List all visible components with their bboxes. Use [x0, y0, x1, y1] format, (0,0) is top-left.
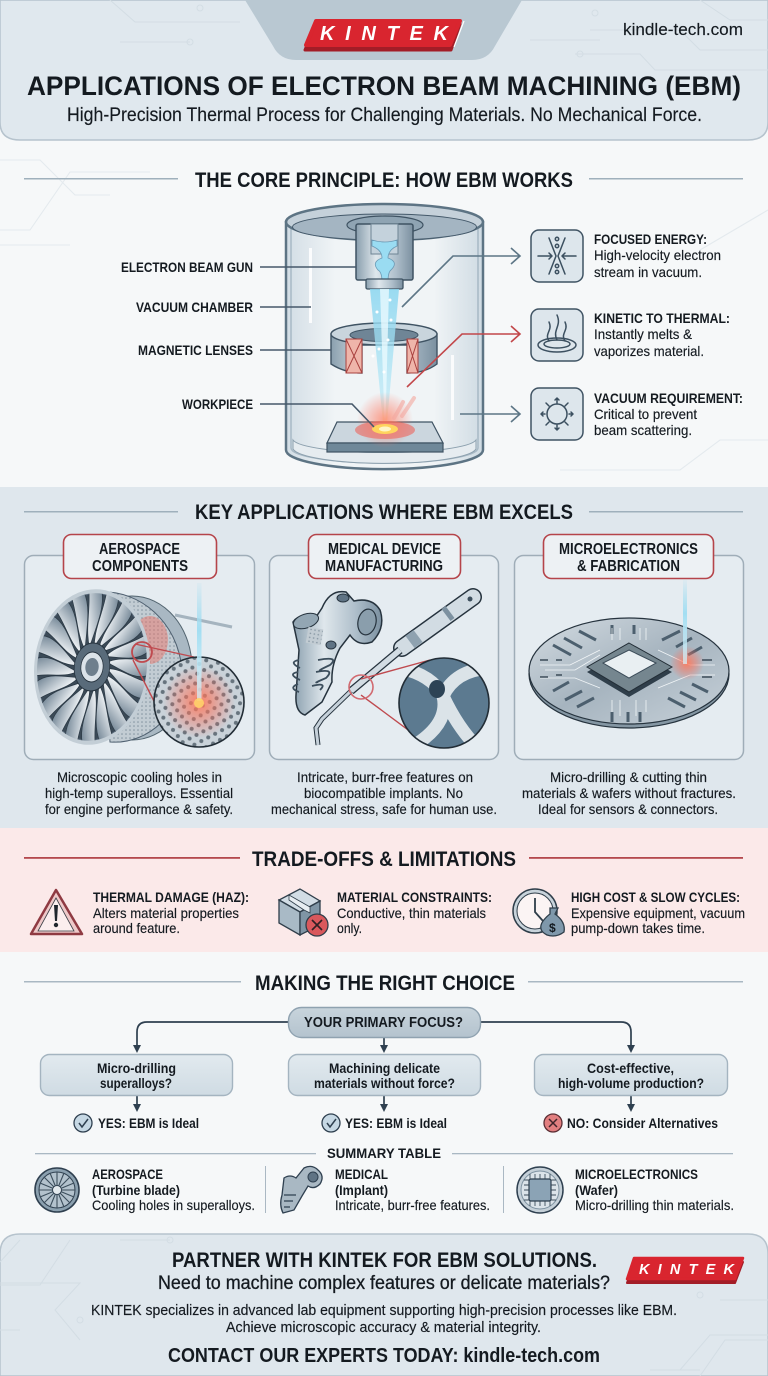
option: cost-effective: high-volume production? [558, 1075, 704, 1091]
description: aerospace: for engine performance & safety. [45, 801, 233, 817]
badge: medical device manufacturing: MEDICAL DEVICE [328, 541, 441, 558]
heading: trade-offs: TRADE-OFFS & LIMITATIONS [252, 848, 516, 871]
callout: focused energy: stream in vacuum. [594, 264, 702, 280]
result: no [544, 1114, 718, 1132]
arrow: vacuum requirement [460, 406, 520, 422]
arrow: kinetic to thermal [407, 326, 520, 387]
panel: medical [270, 534, 498, 760]
footer body text: Achieve microscopic accuracy & material integrity. [226, 1320, 541, 1336]
callout: kinetic to thermal: Instantly melts & [594, 326, 693, 342]
callout: focused energy [531, 230, 721, 282]
footer logo: KINTEK [639, 1262, 736, 1278]
row: aerospace [35, 1166, 255, 1213]
icon: vacuum particles [531, 388, 583, 440]
label: vacuum chamber: VACUUM CHAMBER [136, 299, 253, 315]
title: APPLICATIONS OF ELECTRON BEAM MACHINING (EBM) [27, 71, 741, 101]
row: microelectronics: Micro-drilling thin materials. [575, 1197, 734, 1213]
callout: kinetic to thermal: KINETIC TO THERMAL: [594, 310, 730, 326]
row: aerospace: AEROSPACE [92, 1166, 163, 1182]
badge: aerospace components [64, 534, 216, 578]
row: microelectronics [517, 1166, 734, 1213]
footer logo [627, 1258, 743, 1283]
illustration: wafer [529, 580, 729, 728]
option: cost-effective: Cost-effective, [587, 1060, 674, 1076]
description: microelectronics [522, 769, 736, 817]
subtitle: High-Precision Thermal Process for Challenging Materials. No Mechanical Force. [67, 105, 702, 126]
limitation: high cost: HIGH COST & SLOW CYCLES: [571, 889, 740, 905]
description: medical: mechanical stress, safe for human use. [271, 801, 497, 817]
description: medical: Intricate, burr-free features on [297, 769, 473, 785]
callout: kinetic to thermal: vaporizes material. [594, 343, 704, 359]
section: key applications [0, 487, 768, 828]
result: yes [74, 1114, 199, 1132]
panel: aerospace [24, 534, 254, 817]
badge: medical device manufacturing: MANUFACTURING [325, 558, 443, 575]
description: medical: biocompatible implants. No [304, 785, 463, 801]
limitation: high cost: Expensive equipment, vacuum [571, 905, 745, 921]
zoom lens: burr-free feature [349, 658, 490, 748]
description: aerospace: Microscopic cooling holes in [57, 769, 222, 785]
icon: clock and money bag: $ [549, 921, 556, 935]
badge: aerospace components: COMPONENTS [92, 558, 188, 575]
description: microelectronics: Micro-drilling & cutting thin [550, 769, 707, 785]
result: yes: YES: EBM is Ideal [345, 1115, 447, 1131]
row: microelectronics: (Wafer) [575, 1182, 618, 1198]
label: electron beam gun: ELECTRON BEAM GUN [121, 259, 253, 275]
icon: focused energy [531, 230, 583, 282]
heading: key applications: KEY APPLICATIONS WHERE EBM EXCELS [195, 501, 573, 524]
footer heading: PARTNER WITH KINTEK FOR EBM SOLUTIONS. [172, 1249, 597, 1272]
limitation: high cost: pump-down takes time. [571, 920, 705, 936]
heading: core principle: THE CORE PRINCIPLE: HOW EBM WORKS [195, 169, 573, 192]
callout: kinetic to thermal [531, 309, 730, 361]
footer panel [0, 1234, 768, 1376]
limitation: material constraints: only. [337, 920, 362, 936]
description: medical [271, 769, 497, 817]
website link: kindle-tech.com [623, 20, 743, 39]
limitation: material constraints: MATERIAL CONSTRAINTS: [337, 889, 492, 905]
callout: vacuum requirement: beam scattering. [594, 422, 692, 438]
result: yes: YES: EBM is Ideal [98, 1115, 199, 1131]
label: magnetic lenses: MAGNETIC LENSES [138, 342, 253, 358]
logo: KINTEK [320, 23, 450, 45]
logo tab [245, 0, 522, 60]
badge: microelectronics and fabrication [544, 534, 714, 578]
callout: vacuum requirement: VACUUM REQUIREMENT: [594, 390, 743, 406]
limitation: thermal damage: THERMAL DAMAGE (HAZ): [93, 889, 249, 905]
footer body text: KINTEK specializes in advanced lab equipment supporting high-precision processes like EBM. [91, 1303, 677, 1319]
contact call to action: CONTACT OUR EXPERTS TODAY: kindle-tech.com [168, 1345, 600, 1367]
illustration: implant [291, 592, 382, 715]
row: medical: MEDICAL [335, 1166, 388, 1182]
label: workpiece: WORKPIECE [182, 396, 253, 412]
result: yes [322, 1114, 447, 1132]
limitation: high cost [513, 889, 745, 936]
badge: medical device manufacturing [308, 534, 460, 578]
row: medical: Intricate, burr-free features. [335, 1197, 490, 1213]
limitation: material constraints [279, 889, 492, 936]
option: micro-drilling: Micro-drilling [97, 1060, 176, 1076]
description: microelectronics: Ideal for sensors & connectors. [538, 801, 718, 817]
limitation: thermal damage [31, 889, 249, 936]
icon: heat waves [531, 309, 583, 361]
icon: clock and money bag [513, 889, 564, 936]
connectors [133, 1022, 635, 1112]
description: microelectronics: materials & wafers without fractures. [522, 785, 736, 801]
icon: warning triangle [31, 890, 82, 934]
circuit decor [0, 160, 768, 470]
limitation: thermal damage: around feature. [93, 920, 180, 936]
badge: microelectronics and fabrication: & FABRICATION [577, 558, 680, 575]
section: trade-offs [0, 828, 768, 952]
decision: primary focus [288, 1008, 480, 1038]
header panel [0, 0, 768, 140]
section: right choice [24, 972, 743, 1132]
workpiece [327, 392, 443, 452]
badge: microelectronics and fabrication: MICROELECTRONICS [559, 541, 698, 558]
zoom lens: cooling holes [132, 583, 244, 747]
row: aerospace: Cooling holes in superalloys. [92, 1197, 255, 1213]
decision: primary focus: YOUR PRIMARY FOCUS? [304, 1015, 463, 1031]
limitation: thermal damage: Alters material properties [93, 905, 239, 921]
option: micro-drilling [40, 1054, 232, 1096]
description: aerospace: high-temp superalloys. Essential [45, 785, 233, 801]
icon: turbine [35, 1168, 79, 1212]
icon: wafer chip [517, 1167, 563, 1213]
limitation: material constraints: Conductive, thin materials [337, 905, 486, 921]
logo [305, 21, 464, 50]
result: no: NO: Consider Alternatives [567, 1115, 718, 1131]
magnetic lens back [331, 323, 437, 373]
description: aerospace [45, 769, 233, 817]
heading: summary table: SUMMARY TABLE [327, 1145, 441, 1161]
electron beam [370, 289, 399, 423]
summary table [35, 1145, 734, 1213]
icon: implant [281, 1166, 322, 1213]
illustration: surgical tool [316, 596, 473, 745]
callout: vacuum requirement [531, 388, 743, 440]
option: delicate materials: Machining delicate [329, 1060, 440, 1076]
option: cost-effective [534, 1054, 728, 1096]
option: micro-drilling: superalloys? [100, 1075, 172, 1091]
option: delicate materials: materials without force? [314, 1075, 455, 1091]
heading: right choice: MAKING THE RIGHT CHOICE [255, 972, 515, 995]
callout: focused energy: FOCUSED ENERGY: [594, 231, 707, 247]
badge: aerospace components: AEROSPACE [99, 541, 180, 558]
icon: box with cross [279, 889, 328, 936]
callout: focused energy: High-velocity electron [594, 247, 721, 263]
label: workpiece [182, 396, 374, 427]
footer subheading: Need to machine complex features or delicate materials? [158, 1273, 610, 1294]
row: medical: (Implant) [335, 1182, 388, 1198]
flowchart [40, 1008, 728, 1132]
arrow: focused energy [402, 248, 520, 307]
electron gun [347, 216, 423, 289]
illustration: turbine engine [25, 582, 244, 752]
section: core principle [0, 169, 768, 828]
row: medical [281, 1166, 490, 1213]
row: microelectronics: MICROELECTRONICS [575, 1166, 698, 1182]
row: aerospace: (Turbine blade) [92, 1182, 180, 1198]
diagram: vacuum chamber [121, 204, 520, 469]
panel: microelectronics [514, 534, 744, 760]
chip [587, 643, 672, 697]
option: delicate materials [288, 1054, 480, 1096]
footer body text [91, 1303, 677, 1336]
callout: vacuum requirement: Critical to prevent [594, 406, 697, 422]
